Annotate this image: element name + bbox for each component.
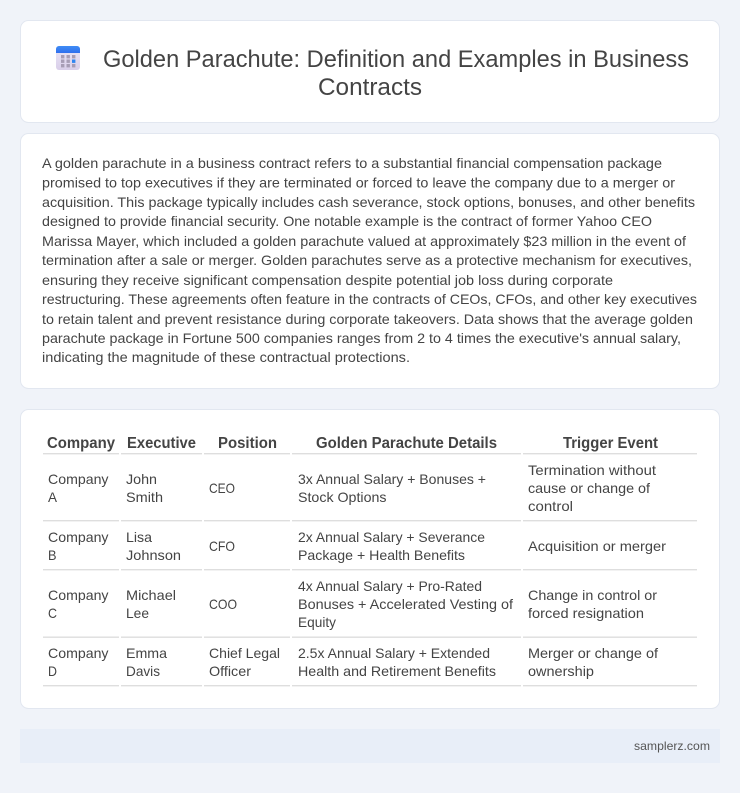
- table row: Company D: Health and Retirement Benefits: [298, 663, 496, 679]
- table row: Company B: Package + Health Benefits: [298, 547, 465, 563]
- table row: Company A: Stock Options: [298, 489, 386, 505]
- table row: Company B: [48, 529, 666, 563]
- text block: description paragraph: termination after a sale or merger. Golden parachutes serve as a protective mechanism for executives,: [42, 252, 692, 268]
- text block: description paragraph: [42, 155, 697, 365]
- table row: Company A: Company: [48, 471, 108, 487]
- table row: Company A: Termination without: [528, 462, 656, 478]
- panel: title: [20, 20, 720, 122]
- text block: description paragraph: to retain talent and prevent resistance during corporate takeovers. Data shows that the average golden: [42, 311, 693, 327]
- footer bar: [20, 729, 720, 763]
- text block: description paragraph: designed to provide financial security. One notable example is the contract of former Yahoo CEO: [42, 213, 652, 229]
- table header row: Company: [47, 435, 115, 452]
- heading: Golden Parachute: Definition and Examples in Business: [103, 46, 689, 73]
- table row: Company A: control: [528, 498, 573, 514]
- table row: Company C: Equity: [298, 614, 336, 630]
- table row: Company B: Acquisition or merger: [528, 538, 666, 554]
- panel: table: [20, 410, 720, 708]
- table row: Company D: Company: [48, 645, 108, 661]
- table row: Company D: 2.5x Annual Salary + Extended: [298, 645, 490, 661]
- table row: Company D: Officer: [209, 663, 251, 679]
- table row: Company C: COO: [209, 596, 237, 612]
- table row: Company A: CEO: [209, 480, 235, 496]
- icon: calendar: [56, 46, 80, 70]
- table row: Company A: John: [126, 471, 157, 487]
- table header row: [47, 435, 658, 452]
- table row: Company B: 2x Annual Salary + Severance: [298, 529, 485, 545]
- text block: description paragraph: Marissa Mayer, which included a golden parachute valued at approximately $23 million in the event of: [42, 233, 686, 249]
- text block: description paragraph: A golden parachute in a business contract refers to a substantial financial compensation package: [42, 155, 662, 171]
- table row: Company D: Emma: [126, 645, 167, 661]
- table row: Company B: Company: [48, 529, 108, 545]
- table row: Company B: Johnson: [126, 547, 181, 563]
- table row: Company C: Company: [48, 587, 108, 603]
- table row: Company B: B: [48, 547, 56, 563]
- table header row: Golden Parachute Details: [316, 435, 497, 452]
- table row: Company C: [48, 578, 657, 630]
- table row: Company C: Michael: [126, 587, 176, 603]
- heading: [103, 46, 689, 101]
- table row: Company A: cause or change of: [528, 480, 650, 496]
- text block: description paragraph: ensuring they receive significant compensation despite potential job loss during corporate: [42, 272, 613, 288]
- table row: Company D: Chief Legal: [209, 645, 280, 661]
- footer source text: samplerz.com: [634, 739, 710, 753]
- text block: description paragraph: promised to top executives if they are terminated or forced to leave the company due to a merger or: [42, 174, 675, 190]
- table header row: Position: [218, 435, 277, 452]
- table row: Company D: Merger or change of: [528, 645, 658, 661]
- table row: Company B: Lisa: [126, 529, 152, 545]
- table row: Company D: Davis: [126, 663, 160, 679]
- table row: Company C: Bonuses + Accelerated Vesting of: [298, 596, 513, 612]
- table row: Company C: Lee: [126, 605, 149, 621]
- heading: Contracts: [318, 74, 422, 101]
- table row: Company A: 3x Annual Salary + Bonuses +: [298, 471, 486, 487]
- text block: description paragraph: indicating the magnitude of these contractual protections.: [42, 349, 410, 365]
- table header row: Executive: [127, 435, 196, 452]
- table row: Company D: [48, 645, 658, 679]
- table row: Company C: 4x Annual Salary + Pro-Rated: [298, 578, 482, 594]
- panel: description: [20, 134, 720, 388]
- table row: Company A: A: [48, 489, 58, 505]
- table row: Company C: Change in control or: [528, 587, 657, 603]
- table row: Company C: C: [48, 605, 57, 621]
- table row: Company A: [48, 462, 656, 514]
- text block: description paragraph: parachute package in Fortune 500 companies ranges from 2 to 4 times the executive's annual salary,: [42, 330, 681, 346]
- text block: description paragraph: acquisition. This package typically includes cash severance, stock options, bonuses, and other benefits: [42, 194, 695, 210]
- table row: Company D: D: [48, 663, 57, 679]
- table row: Company C: forced resignation: [528, 605, 644, 621]
- table row: Company D: ownership: [528, 663, 594, 679]
- table header row: Trigger Event: [563, 435, 658, 452]
- table row: Company B: CFO: [209, 538, 235, 554]
- text block: description paragraph: restructuring. These agreements often feature in the contracts of CEOs, CFOs, and other key executives: [42, 291, 697, 307]
- table row: Company A: Smith: [126, 489, 163, 505]
